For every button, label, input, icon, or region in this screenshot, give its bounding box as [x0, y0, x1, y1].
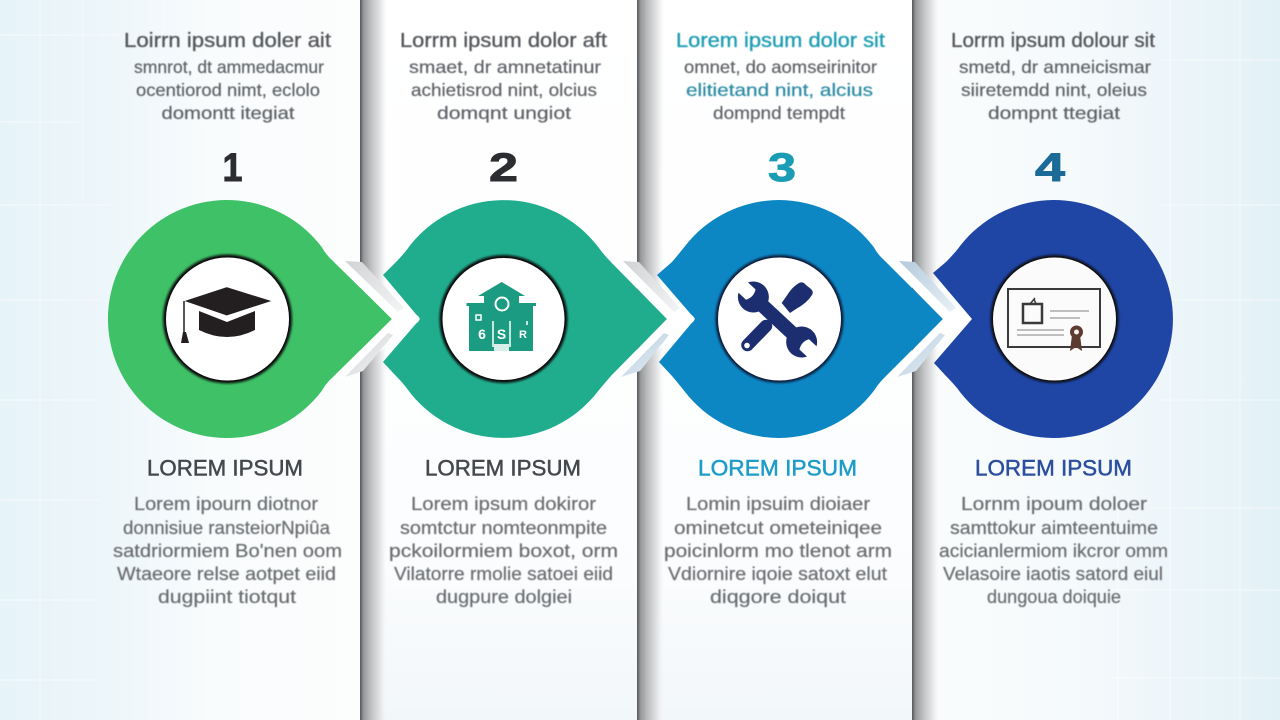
column 2 intro text: achietisrod nint, olcius [411, 80, 597, 100]
column 2 intro text [400, 30, 607, 123]
column 2 body text: dugpure dolgiei [436, 587, 572, 607]
number 4: 4 [1035, 146, 1066, 190]
column 4 intro text: Lorrm ipsum dolour sit [951, 30, 1155, 52]
column 2 intro text: domqnt ungiot [437, 103, 571, 123]
icon: school building: 6 [478, 326, 486, 342]
icon: certificate [990, 255, 1118, 383]
drop 4: dark blue [933, 200, 1173, 438]
column 4 body text: acicianlermiom ikcror omm [939, 541, 1168, 561]
column 2 body text: pckoilormiem boxot, orm [389, 541, 618, 561]
column 3 intro text: dompnd tempdt [713, 103, 845, 123]
panel: column 3 background [637, 0, 912, 720]
column 1 intro text [124, 30, 331, 123]
icon: graduation cap [163, 254, 292, 384]
column 3 body text: poicinlorm mo tlenot arm [664, 541, 892, 561]
column 2 body text: Lorem ipsum dokiror [411, 494, 596, 514]
heading: lorem ipsum 3: LOREM IPSUM [698, 456, 857, 480]
column 3 body text: diqgore doiqut [710, 587, 846, 607]
column 3 intro text: Lorem ipsum dolor sit [676, 30, 885, 52]
column 1 intro text: ocentiorod nimt, eclolo [136, 80, 320, 100]
column 1 intro text: Loirrn ipsum doler ait [124, 30, 331, 52]
column 1 body text [113, 494, 342, 607]
drop 3: blue [657, 200, 943, 438]
arrow chevron 1 [334, 260, 420, 378]
drop 2: teal [383, 200, 667, 438]
column 4 body text: Lornm ipoum doloer [961, 494, 1147, 514]
icon: school building: R [519, 329, 527, 341]
column 1 body text: Wtaeore relse aotpet eiid [117, 564, 336, 584]
icon: school building [440, 255, 568, 383]
panel: column 2 background [360, 0, 637, 720]
column 4 intro text: dompnt ttegiat [988, 103, 1120, 123]
heading: lorem ipsum 4: LOREM IPSUM [975, 456, 1132, 480]
column 1 intro text: smnrot, dt ammedacmur [134, 57, 324, 77]
column 1 body text: satdriormiem Bo'nen oom [113, 541, 342, 561]
column 4 intro text [951, 30, 1155, 123]
heading: lorem ipsum 1: LOREM IPSUM [147, 456, 303, 480]
column 3 intro text: elitietand nint, alcius [686, 80, 873, 100]
column 2 body text [389, 494, 618, 607]
column 4 body text: dungoua doiquie [987, 587, 1121, 607]
arrow chevron 3 [887, 260, 970, 378]
column 3 body text [664, 494, 892, 607]
number 2: 2 [489, 146, 518, 190]
column 4 intro text: smetd, dr amneicismar [959, 57, 1151, 77]
icon: school building: S [497, 326, 506, 342]
column 4 body text: samttokur aimteentuime [950, 518, 1158, 538]
column 4 body text [939, 494, 1168, 607]
arrow chevron 2 [611, 260, 694, 378]
icon: wrench and screwdriver [716, 255, 844, 383]
column 1 body text: dugpiint tiotqut [158, 587, 296, 607]
column 3 body text: ominetcut ometeiniqee [674, 518, 882, 538]
column 4 body text: Velasoire iaotis satord eiul [943, 564, 1163, 584]
column 1 body text: donnisiue ransteiorNpiûa [123, 518, 331, 538]
number 3: 3 [768, 146, 796, 190]
column 2 body text: somtctur nomteonmpite [400, 518, 607, 538]
drop 1: green [108, 200, 392, 438]
heading: lorem ipsum 2: LOREM IPSUM [425, 456, 581, 480]
column 2 intro text: smaet, dr amnetatinur [409, 57, 601, 77]
column 3 intro text [676, 30, 885, 123]
column 1 body text: Lorem ipourn diotnor [134, 494, 318, 514]
column 1 intro text: domontt itegiat [162, 103, 295, 123]
column 3 body text: Vdiornire iqoie satoxt elut [668, 564, 887, 584]
panel edge shadows [360, 0, 939, 720]
column 4 intro text: siiretemdd nint, oleius [961, 80, 1147, 100]
column 3 body text: Lomin ipsuim dioiaer [686, 494, 870, 514]
column 3 intro text: omnet, do aomseirinitor [684, 57, 877, 77]
column 2 body text: Vilatorre rmolie satoei eiid [394, 564, 613, 584]
number 1: 1 [222, 146, 242, 190]
column 2 intro text: Lorrm ipsum dolor aft [400, 30, 607, 52]
